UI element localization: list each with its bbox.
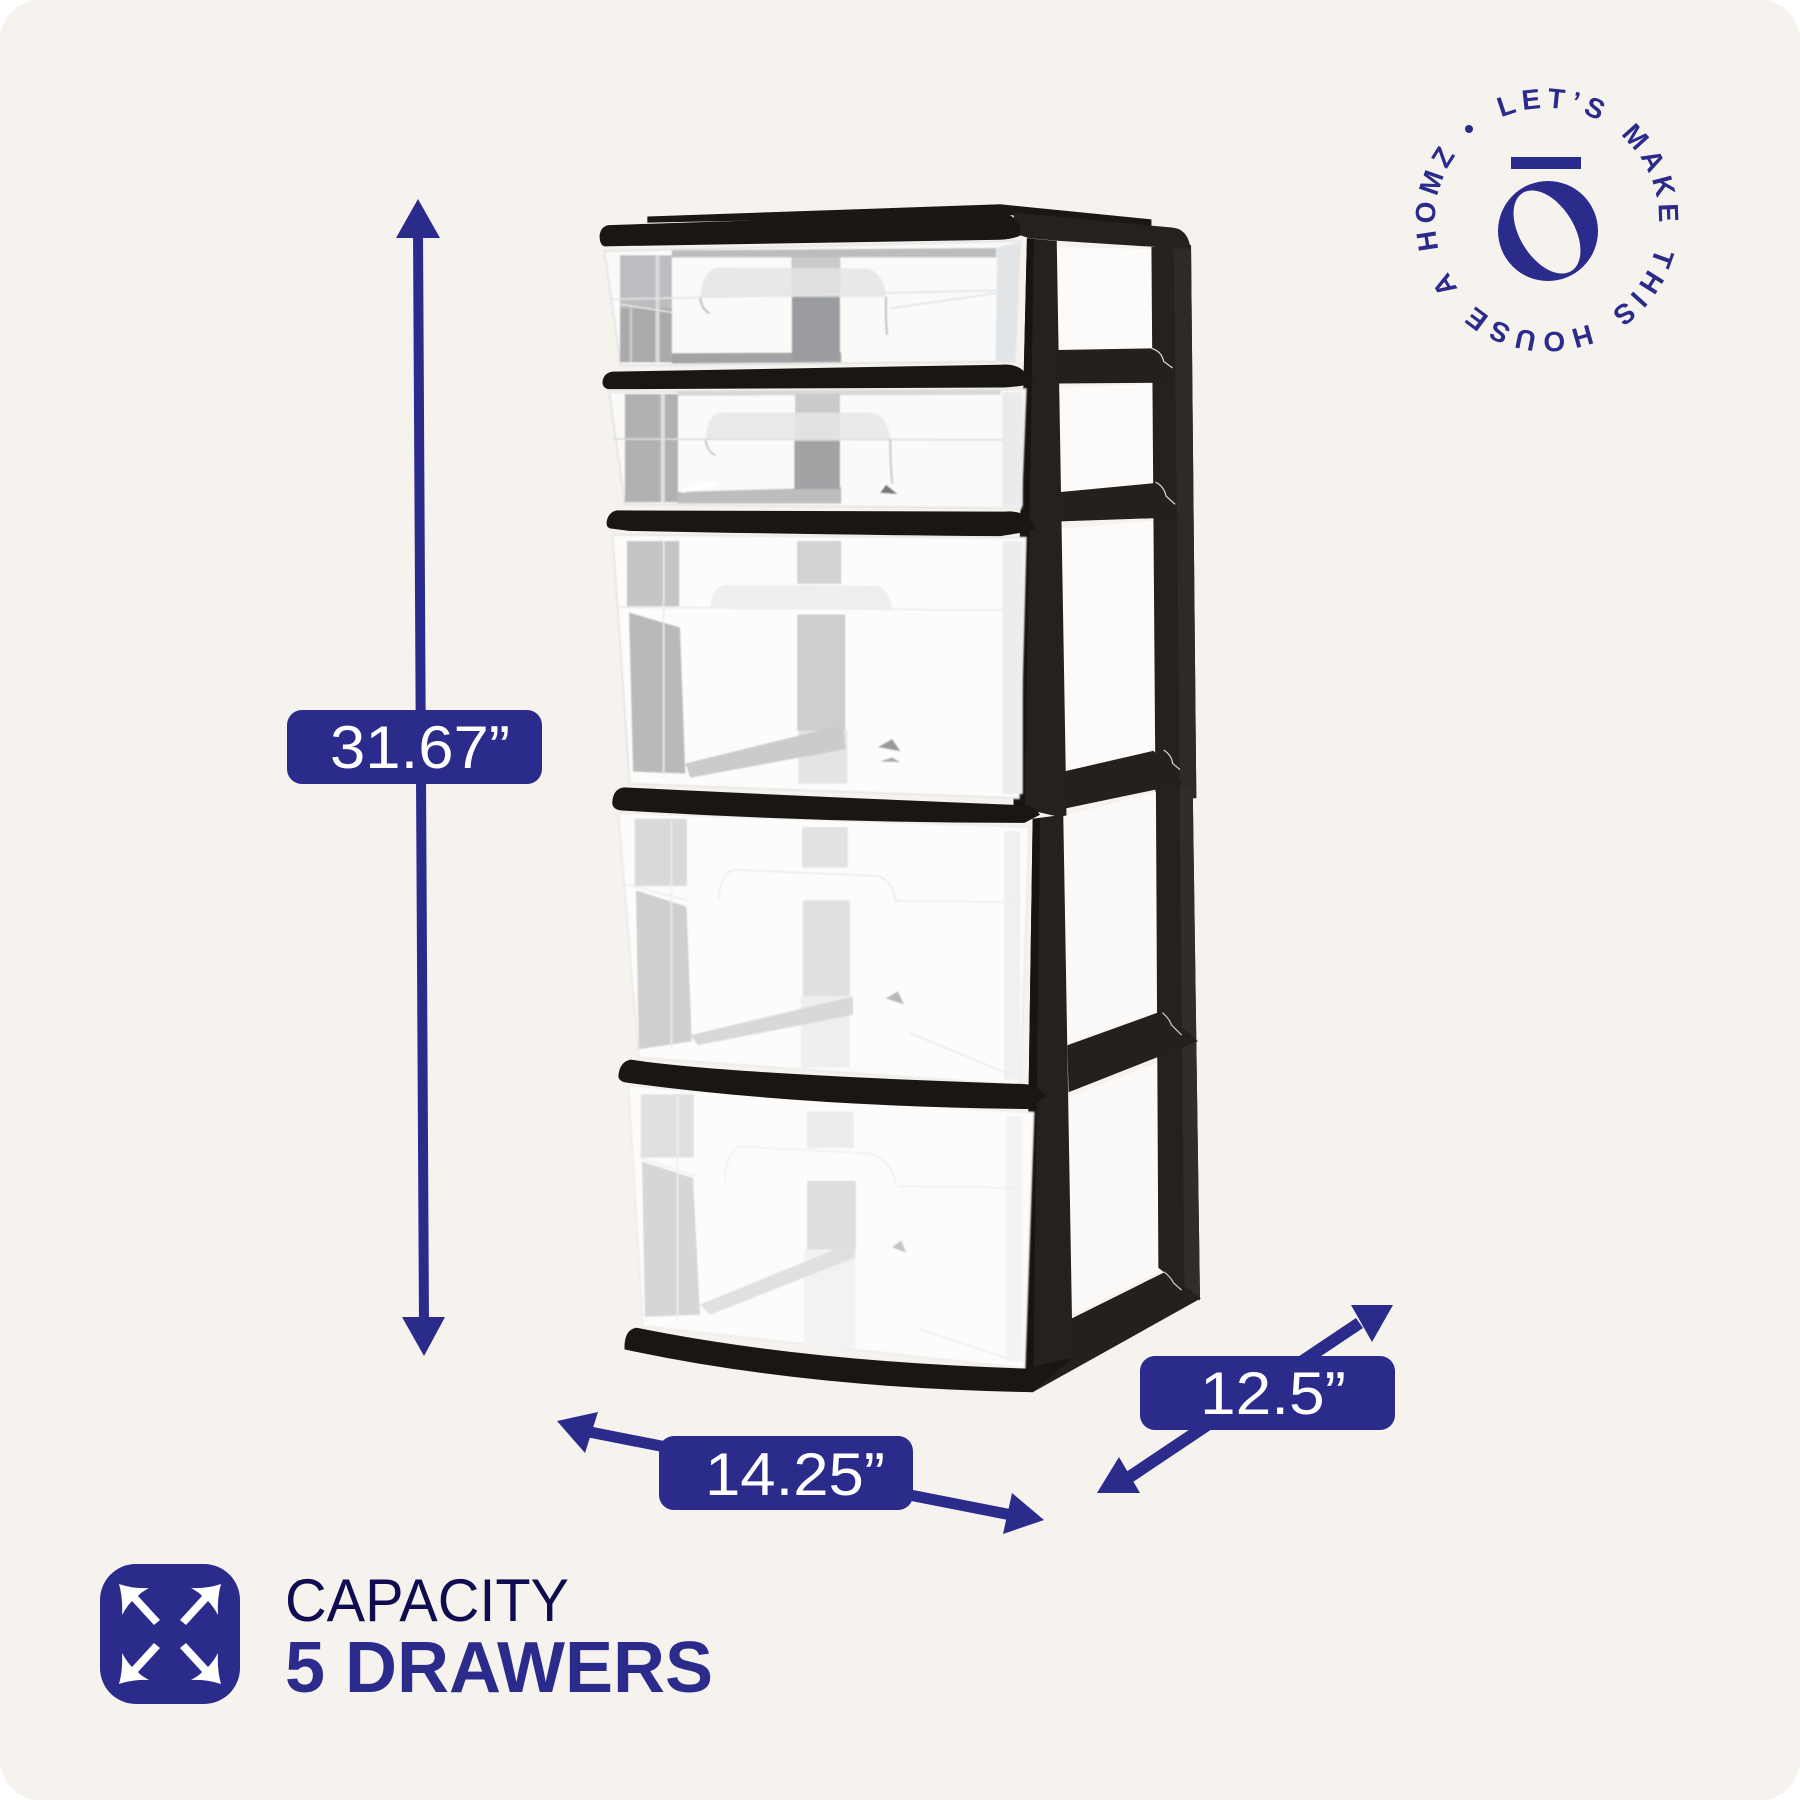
rails and drawer lips upper	[600, 212, 1036, 536]
circular tagline text: LET’S MAKE THIS HOUSE A HOMZ	[1416, 88, 1678, 352]
upper section of tower	[600, 204, 1196, 819]
capacity text: CAPACITY	[285, 1567, 569, 1634]
depth dimension arrow	[1097, 1305, 1393, 1493]
drawer 4 clear body	[618, 813, 1029, 1085]
capacity text: 5 DRAWERS	[285, 1628, 713, 1708]
depth label 12.5 inches: 12.5”	[1200, 1360, 1346, 1427]
rails and drawer lips lower	[612, 787, 1073, 1392]
drawer 1 clear body	[604, 241, 1020, 366]
side windows lower	[1061, 791, 1160, 1317]
width dimension arrow	[557, 1412, 1044, 1534]
lower section of tower	[612, 784, 1201, 1392]
drawer 5 clear body	[629, 1086, 1033, 1369]
drawer 2 clear body	[609, 389, 1026, 508]
side windows upper	[1053, 247, 1156, 772]
height label 31.67 inches	[287, 710, 542, 784]
width label 14.25 inches: 14.25”	[705, 1441, 885, 1508]
frame lower	[1024, 784, 1201, 1392]
depth label 12.5 inches	[1140, 1356, 1395, 1430]
width label 14.25 inches	[659, 1436, 913, 1510]
height label 31.67 inches: 31.67”	[330, 714, 510, 781]
icon: circular o logo with macron	[1498, 157, 1598, 285]
frame upper	[647, 204, 1196, 819]
brand logo badge	[1416, 88, 1678, 352]
capacity text	[285, 1567, 713, 1708]
height dimension arrow	[396, 199, 445, 1356]
capacity icon	[100, 1564, 240, 1704]
drawer 3 clear body	[613, 535, 1026, 798]
product: five drawer storage tower	[600, 204, 1201, 1392]
